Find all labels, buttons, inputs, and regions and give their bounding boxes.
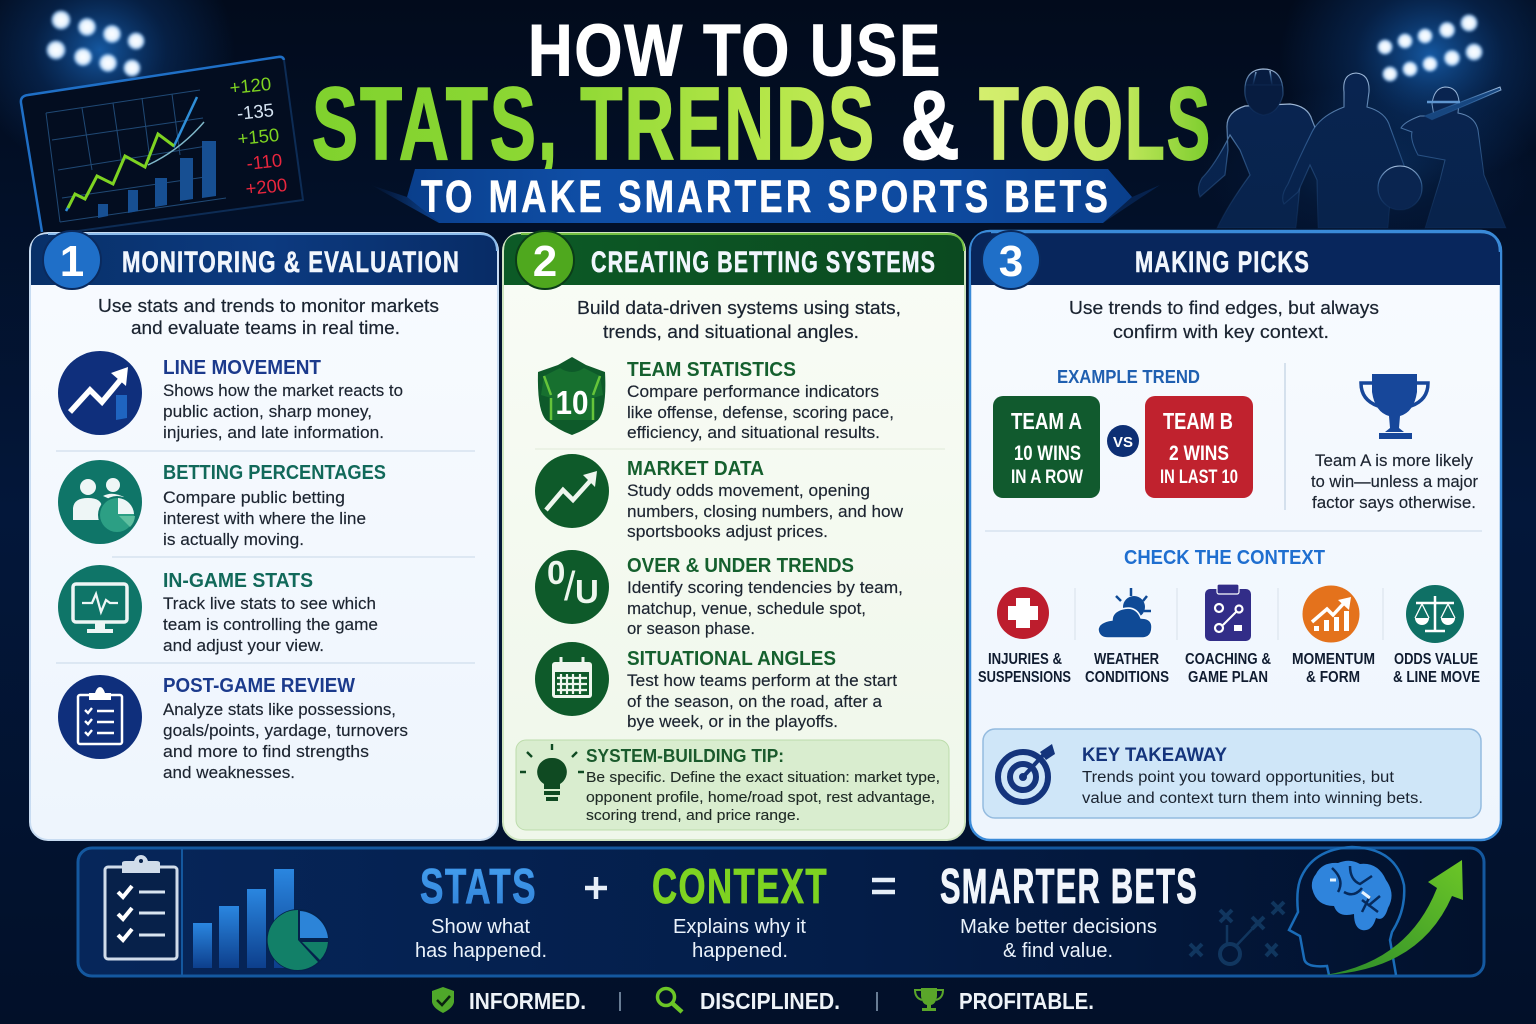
odds values: -135: [236, 99, 275, 124]
over and under trends: matchup, venue, schedule spot,: [627, 600, 866, 618]
panel 1 header: 1: [60, 237, 84, 286]
in-game stats: IN-GAME STATS: [163, 570, 313, 592]
in-game stats: team is controlling the game: [163, 616, 378, 634]
icon: people and pie: [58, 460, 142, 544]
athlete silhouettes: [1198, 69, 1506, 228]
icon: calendar: [535, 642, 609, 716]
icon: bar and pie chart: [193, 869, 329, 971]
smarter bets: [940, 860, 1198, 962]
line movement: injuries, and late information.: [163, 424, 384, 442]
panel 3 intro: confirm with key context.: [1113, 322, 1329, 342]
factor: coaching: [1185, 584, 1271, 686]
check the context: [978, 547, 1480, 686]
disciplined: DISCIPLINED.: [700, 988, 840, 1014]
line movement: LINE MOVEMENT: [163, 357, 321, 379]
profitable: PROFITABLE.: [959, 988, 1094, 1014]
basketball player: [1283, 73, 1422, 228]
over and under trends: OVER & UNDER TRENDS: [627, 555, 854, 577]
stadium lights right: [1377, 14, 1483, 82]
vs badge: VS: [1113, 434, 1133, 451]
icon: over under: U: [575, 573, 599, 610]
subtitle ribbon: TO MAKE SMARTER SPORTS BETS: [421, 171, 1111, 222]
callout: system-building tip: scoring trend, and price range.: [586, 807, 800, 824]
panel 2 intro: trends, and situational angles.: [603, 322, 859, 342]
panel 3 header: MAKING PICKS: [1135, 246, 1310, 279]
callout: key takeaway: KEY TAKEAWAY: [1082, 745, 1227, 766]
trophy and outcome: [1311, 374, 1479, 512]
panel 2 header: [504, 231, 964, 289]
betting percentages: BETTING PERCENTAGES: [163, 462, 386, 484]
stats: [415, 860, 547, 962]
vs badge: [1107, 425, 1139, 457]
team statistics: like offense, defense, scoring pace,: [627, 404, 894, 422]
factor: weather: [1085, 588, 1169, 686]
post-game review: and weaknesses.: [163, 764, 295, 782]
team b card: IN LAST 10: [1160, 467, 1238, 488]
title: &: [900, 70, 960, 180]
line movement: public action, sharp money,: [163, 403, 372, 421]
icon: trophy: [1361, 374, 1428, 439]
icon: over under: [535, 550, 609, 624]
factor: odds value: ODDS VALUE: [1394, 651, 1478, 668]
smarter bets: SMARTER BETS: [940, 860, 1198, 914]
over and under trends: [535, 550, 903, 638]
team b card: 2 WINS: [1169, 442, 1229, 465]
factor: odds value: [1393, 585, 1480, 686]
icon: light bulb: [520, 744, 584, 801]
situational angles: SITUATIONAL ANGLES: [627, 648, 836, 670]
stats: STATS: [420, 860, 537, 914]
check the context: CHECK THE CONTEXT: [1124, 547, 1325, 569]
icon: trend line: [535, 454, 609, 528]
factor: momentum: MOMENTUM: [1292, 651, 1375, 668]
informed: INFORMED.: [469, 988, 586, 1014]
icon: clipboard: [58, 675, 142, 759]
betting percentages: is actually moving.: [163, 531, 304, 549]
situational angles: Test how teams perform at the start: [627, 672, 897, 690]
title: HOW TO USE: [528, 10, 942, 92]
title: [312, 10, 1212, 181]
callout: key takeaway: value and context turn them into winning bets.: [1082, 790, 1423, 807]
callout: system-building tip: SYSTEM-BUILDING TIP:: [586, 746, 784, 766]
market data: MARKET DATA: [627, 458, 764, 480]
team statistics: Compare performance indicators: [627, 383, 879, 401]
informed: [432, 987, 586, 1014]
context: [652, 860, 828, 962]
icon: monitor: [58, 565, 142, 649]
icon: over under: 0: [547, 554, 565, 591]
icon: rising line: [58, 351, 142, 435]
panel 2 intro: Build data-driven systems using stats,: [577, 298, 901, 318]
example trend: EXAMPLE TREND: [1057, 367, 1200, 387]
odds values: +150: [237, 124, 280, 149]
factor: coaching: COACHING &: [1185, 651, 1271, 668]
factor: injuries: INJURIES &: [988, 651, 1062, 668]
panel 2 header: CREATING BETTING SYSTEMS: [591, 246, 936, 279]
odds values: -110: [245, 149, 283, 174]
in-game stats: and adjust your view.: [163, 637, 324, 655]
panel 3: making picks: [970, 231, 1501, 840]
factor: weather: CONDITIONS: [1085, 669, 1169, 686]
icon: jersey shield: 10: [556, 384, 588, 421]
callout: key takeaway: [983, 729, 1481, 818]
panel 3 intro: [1069, 298, 1379, 342]
panel 1 intro: and evaluate teams in real time.: [131, 318, 400, 338]
market data: [535, 454, 903, 541]
betting percentages: [58, 460, 386, 549]
post-game review: [58, 675, 408, 782]
post-game review: and more to find strengths: [163, 743, 369, 761]
context: happened.: [692, 940, 788, 962]
team a card: [993, 396, 1100, 498]
icon: target: [998, 744, 1055, 802]
playbook diagram: [1190, 902, 1284, 964]
market data: numbers, closing numbers, and how: [627, 503, 903, 521]
smarter bets: & find value.: [1003, 940, 1113, 962]
profitable: [915, 988, 1094, 1014]
bottom banner: formula: [78, 847, 1484, 976]
team statistics: TEAM STATISTICS: [627, 359, 796, 381]
stats: Show what: [431, 916, 530, 938]
panel 3 header: 3: [999, 237, 1023, 286]
panel 2 header: 2: [533, 237, 557, 286]
panel 1 header: [31, 231, 497, 289]
panel 1: monitoring and evaluation: [30, 231, 498, 840]
situational angles: of the season, on the road, after a: [627, 693, 883, 711]
baseball player: [1401, 87, 1506, 228]
example trend: [993, 367, 1253, 498]
factor: injuries: SUSPENSIONS: [978, 669, 1071, 686]
panel 3 intro: Use trends to find edges, but always: [1069, 298, 1379, 318]
context: CONTEXT: [652, 860, 828, 914]
footer values: [432, 987, 1094, 1014]
team statistics: [538, 357, 894, 442]
factor: weather: WEATHER: [1094, 651, 1159, 668]
situational angles: bye week, or in the playoffs.: [627, 713, 838, 731]
team a card: 10 WINS: [1014, 442, 1081, 465]
odds values: +200: [245, 174, 288, 199]
icon: checklist clipboard: [105, 855, 177, 959]
factor: momentum: & FORM: [1306, 669, 1360, 686]
betting percentages: Compare public betting: [163, 489, 345, 507]
trophy and outcome: Team A is more likely: [1315, 452, 1474, 470]
market data: Study odds movement, opening: [627, 482, 870, 500]
arrow: rising green: [1325, 860, 1463, 975]
callout: system-building tip: opponent profile, home/road spot, rest advantage,: [586, 789, 935, 806]
trophy and outcome: factor says otherwise.: [1312, 494, 1476, 512]
callout: system-building tip: [516, 740, 949, 830]
callout: key takeaway: Trends point you toward opportunities, but: [1082, 769, 1395, 786]
icon: over under: /: [564, 563, 576, 609]
trophy and outcome: to win—unless a major: [1311, 473, 1479, 491]
post-game review: POST-GAME REVIEW: [163, 675, 355, 697]
over and under trends: or season phase.: [627, 620, 755, 638]
in-game stats: [58, 565, 378, 655]
smarter bets: Make better decisions: [960, 916, 1157, 938]
panel 3 header: [971, 231, 1500, 289]
market data: sportsbooks adjust prices.: [627, 523, 828, 541]
panel 2 intro: [577, 298, 901, 342]
icon: jersey shield: [538, 357, 605, 435]
post-game review: Analyze stats like possessions,: [163, 701, 396, 719]
panel 1 intro: Use stats and trends to monitor markets: [98, 296, 439, 316]
factor: injuries: [978, 587, 1071, 686]
stats: has happened.: [415, 940, 547, 962]
factor: momentum: [1292, 586, 1375, 686]
team statistics: efficiency, and situational results.: [627, 424, 880, 442]
panel 1 intro: [98, 296, 439, 338]
title: TOOLS: [979, 66, 1212, 181]
betting percentages: interest with where the line: [163, 510, 366, 528]
post-game review: goals/points, yardage, turnovers: [163, 722, 408, 740]
team a card: IN A ROW: [1011, 467, 1083, 488]
line movement: [58, 351, 403, 442]
factor: odds value: & LINE MOVE: [1393, 669, 1480, 686]
odds values: [229, 73, 288, 199]
odds tablet chart: [21, 57, 303, 236]
line movement: Shows how the market reacts to: [163, 382, 403, 400]
odds values: +120: [229, 73, 272, 98]
team a card: TEAM A: [1011, 408, 1082, 434]
in-game stats: Track live stats to see which: [163, 595, 376, 613]
title: STATS, TRENDS: [312, 66, 876, 181]
team b card: [1145, 396, 1253, 498]
football player: [1198, 69, 1318, 228]
panel 2: creating betting systems: [503, 231, 965, 840]
stadium lights left: [46, 10, 145, 77]
situational angles: [535, 642, 897, 731]
factor: coaching: GAME PLAN: [1188, 669, 1268, 686]
context: Explains why it: [673, 916, 806, 938]
team b card: TEAM B: [1163, 408, 1233, 434]
plus sign: [585, 877, 607, 899]
panel 1 header: MONITORING & EVALUATION: [122, 246, 460, 279]
over and under trends: Identify scoring tendencies by team,: [627, 579, 903, 597]
icon: head with brain: [1289, 847, 1404, 975]
callout: system-building tip: Be specific. Define the exact situation: market type,: [586, 769, 940, 786]
equals sign: [872, 880, 895, 892]
